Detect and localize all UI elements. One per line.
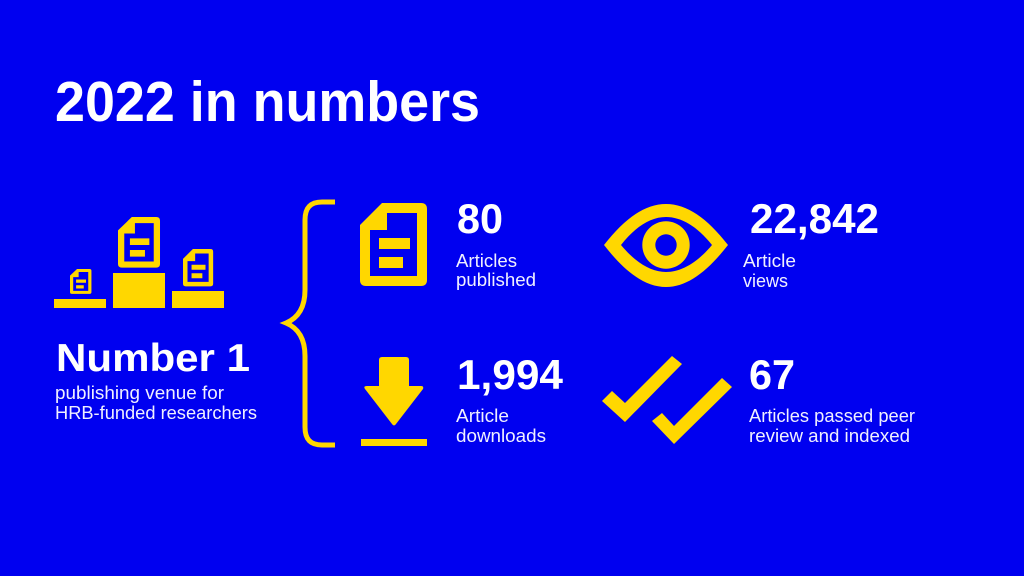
- text: publishing venue description: HRB-funded researchers: [55, 403, 257, 423]
- panel: article views: [604, 195, 879, 291]
- label: articles passed peer review: Articles passed peer: [749, 406, 915, 426]
- panel: peer reviewed articles: [602, 351, 915, 446]
- text: publishing venue description: [55, 383, 257, 423]
- panel: article downloads: [361, 351, 564, 446]
- label: article views: views: [743, 271, 788, 291]
- number: 80: 80: [457, 195, 503, 242]
- icon: download arrow: [361, 357, 427, 446]
- label: article downloads: downloads: [456, 426, 546, 446]
- label: article views: [743, 251, 796, 291]
- curly brace: [286, 202, 335, 445]
- label: articles passed peer review: review and indexed: [749, 426, 910, 446]
- icon: eye: [604, 204, 728, 287]
- number: 67: 67: [749, 351, 795, 398]
- label: article downloads: Article: [456, 406, 509, 426]
- heading: Number 1: Number 1: [56, 337, 250, 380]
- icon: document: [360, 203, 427, 286]
- label: articles published: published: [456, 270, 536, 290]
- label: articles published: [456, 251, 536, 290]
- label: articles passed peer review: [749, 406, 915, 446]
- text: publishing venue description: publishing venue for: [55, 383, 224, 403]
- number: 1,994: 1,994: [457, 351, 564, 398]
- number: 22,842: 22,842: [750, 195, 879, 242]
- label: article downloads: [456, 406, 546, 446]
- label: articles published: Articles: [456, 251, 517, 271]
- label: article views: Article: [743, 251, 796, 271]
- panel: number 1 publishing venue: [54, 217, 257, 423]
- icon: double check marks: [602, 356, 732, 444]
- title: 2022 in numbers: [55, 70, 480, 134]
- panel: articles published: [360, 195, 536, 290]
- icon: podium with documents: [54, 217, 224, 308]
